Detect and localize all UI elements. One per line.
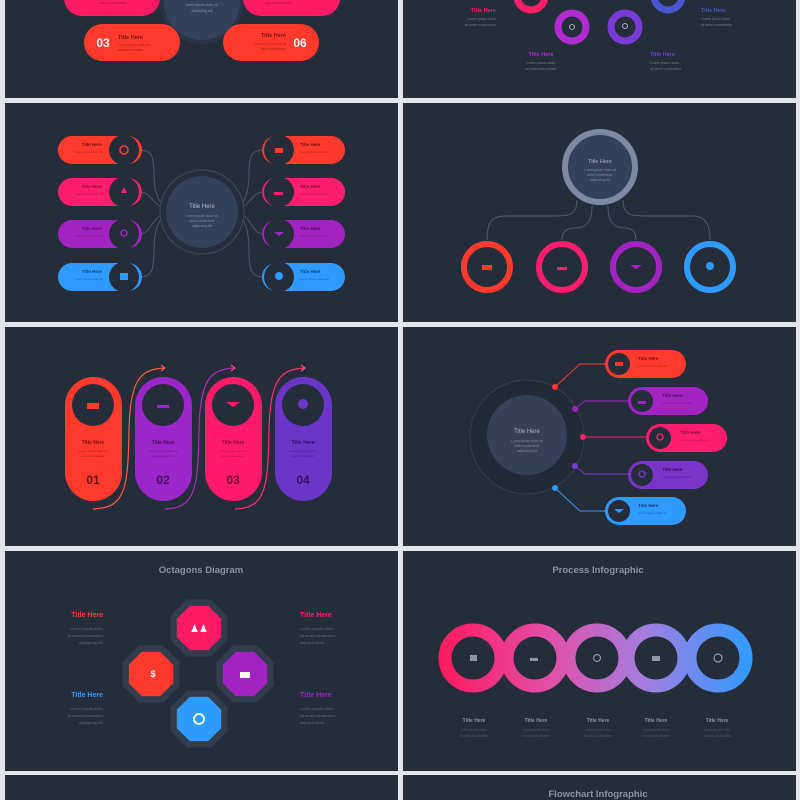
- text: purple: adipiscing elit: [300, 720, 325, 725]
- ring icons: [470, 654, 722, 662]
- column 03: [205, 377, 262, 501]
- pill purple: Title Here: [662, 393, 683, 398]
- labels: [460, 718, 732, 738]
- left pill 4: Title Here: [82, 269, 102, 274]
- text: purple: [300, 692, 336, 725]
- pill blue: Title Here: [638, 503, 659, 508]
- text: blue: sit amet consectetur: [67, 713, 104, 718]
- right pill 4: Lorem ipsum dolor sit: [300, 277, 329, 281]
- center circle: adipiscing elit: [590, 178, 610, 182]
- text: red: sit amet consectetur: [67, 633, 104, 638]
- octagon left red: [122, 645, 180, 703]
- text: purple: Lorem ipsum dolor: [527, 61, 556, 65]
- text: pink: Lorem ipsum dolor: [467, 17, 497, 21]
- center circle: Title Here: [189, 204, 216, 210]
- octagon left red: $: [150, 669, 156, 679]
- panel: pill cluster (top left): [5, 0, 398, 98]
- octagon bottom blue: [170, 690, 228, 748]
- pill: 03: Lorem ipsum dolor sit: [118, 43, 150, 47]
- right pill 3: Lorem ipsum dolor sit: [300, 234, 329, 238]
- panel: flowchart infographic: Flowchart Infographic: [548, 789, 648, 800]
- arrows: [93, 365, 305, 509]
- ring violet: [611, 13, 639, 41]
- column 01: Title Here: [82, 440, 105, 446]
- text: purple: sit amet consectetur: [300, 713, 336, 718]
- panel: flowchart infographic: [403, 775, 796, 800]
- connectors: [555, 364, 646, 511]
- labels: Lorem ipsum dolor: [585, 728, 612, 732]
- right pill 1: Title Here: [300, 142, 321, 147]
- pill violet: Lorem ipsum dolor sit: [662, 475, 691, 479]
- labels: Lorem ipsum dolor: [523, 728, 550, 732]
- column 01: Lorem ipsum dolor sit: [79, 449, 108, 453]
- center circle: Title Here: [514, 429, 541, 435]
- text: violet: Title Here: [650, 52, 675, 58]
- column 02: amet consectetur: [151, 454, 175, 458]
- center circle: amet consectetur: [587, 173, 614, 177]
- text: blue: [67, 692, 104, 725]
- labels: sit amet consectetur: [703, 734, 732, 738]
- left pill 2: Lorem ipsum dolor sit: [74, 192, 103, 196]
- column 01: [65, 377, 122, 501]
- child ring purple: [613, 244, 659, 290]
- connectors: [487, 200, 710, 240]
- text: blue: sit amet consectetur: [701, 23, 733, 27]
- pill: top right pink: amet consectetur: [265, 1, 293, 5]
- pill purple: [628, 387, 708, 415]
- text: purple: Lorem ipsum dolor: [300, 706, 334, 711]
- center circle: amet consectetur: [189, 219, 216, 223]
- ring purple: [558, 13, 586, 41]
- pill pink: Title Here: [680, 430, 701, 435]
- left pill 1: Title Here: [82, 142, 102, 147]
- text: pink: adipiscing elit: [300, 640, 325, 645]
- text: purple: Title Here: [300, 692, 332, 699]
- right pill 3: Title Here: [300, 226, 321, 231]
- labels: Lorem ipsum dolor: [461, 728, 488, 732]
- pill pink: Lorem ipsum dolor sit: [680, 438, 709, 442]
- text: red: Lorem ipsum dolor: [70, 626, 104, 631]
- left pill 4: Lorem ipsum dolor sit: [74, 277, 103, 281]
- left pill 3: Lorem ipsum dolor sit: [74, 234, 103, 238]
- text: red: adipiscing elit: [79, 640, 104, 645]
- panel: process infographic: [403, 551, 796, 771]
- column 02: 02: [156, 473, 170, 487]
- right pill 2: Lorem ipsum dolor sit: [300, 192, 329, 196]
- panel: ring timeline (top right): [403, 0, 796, 98]
- pill: 06: 06: [293, 36, 307, 50]
- outer ring: [470, 380, 584, 494]
- labels: sit amet consectetur: [522, 734, 551, 738]
- labels: Lorem ipsum dolor: [643, 728, 670, 732]
- right pill 3: [262, 219, 345, 249]
- column 01: 01: [86, 473, 100, 487]
- center circle: [487, 395, 567, 475]
- labels: Title Here: [463, 718, 486, 724]
- right pill 1: Lorem ipsum dolor sit: [300, 150, 329, 154]
- panel: octagons diagram: [5, 551, 398, 771]
- text: purple: sit amet consectetur: [525, 67, 557, 71]
- octagon top pink: [170, 599, 228, 657]
- panel: radial list: [403, 327, 796, 546]
- pill blue: [605, 497, 686, 525]
- left pill 2: Title Here: [82, 184, 102, 189]
- text: violet: Lorem ipsum dolor: [650, 61, 680, 65]
- column 03: amet consectetur: [221, 454, 245, 458]
- right pill 2: [262, 177, 345, 207]
- column 03: Lorem ipsum dolor sit: [219, 449, 248, 453]
- labels: Title Here: [645, 718, 668, 724]
- center circle: Lorem ipsum dolor sit: [584, 168, 616, 172]
- column 01: amet consectetur: [81, 454, 105, 458]
- column 03: 03: [226, 473, 240, 487]
- panel: bottom left: [5, 775, 398, 800]
- panel: hierarchy tree: [403, 103, 796, 322]
- text: purple: Title Here: [529, 52, 553, 58]
- panel: four step columns: [5, 327, 398, 546]
- text: pink: [465, 8, 497, 27]
- heading: Process Infographic: [552, 565, 644, 576]
- center circle: Lorem ipsum dolor sit: [511, 439, 543, 443]
- connectors: [139, 150, 264, 277]
- text: red: [67, 612, 104, 645]
- labels: Title Here: [706, 718, 729, 724]
- pill: 03: 03: [96, 36, 110, 50]
- text: pink: sit amet consectetur: [300, 633, 336, 638]
- center circle: [160, 170, 244, 254]
- labels: Title Here: [587, 718, 610, 724]
- octagon top pink: ♟♟: [190, 624, 208, 635]
- text: blue: Title Here: [71, 692, 103, 699]
- pill: top right pink: [243, 0, 340, 16]
- pill: 06: [223, 24, 319, 61]
- column 02: Title Here: [152, 440, 175, 446]
- pill: 03: Title Here: [118, 35, 143, 41]
- left pill 1: Lorem ipsum dolor sit: [74, 150, 103, 154]
- column 04: [275, 377, 332, 501]
- text: pink: sit amet consectetur: [465, 23, 497, 27]
- text: blue: [701, 8, 733, 27]
- text: pink: Lorem ipsum dolor: [300, 626, 334, 631]
- text: blue: Lorem ipsum dolor: [70, 706, 104, 711]
- pill: top left pink: [64, 0, 160, 16]
- pill: 03: amet consectetur: [118, 48, 144, 52]
- pill: 06: Title Here: [261, 33, 286, 39]
- octagon right purple: [216, 645, 274, 703]
- pill: 06: amet consectetur: [261, 47, 287, 51]
- pill blue: Lorem ipsum dolor sit: [638, 511, 667, 515]
- right pill 2: Title Here: [300, 184, 321, 189]
- left pill 1: [58, 135, 142, 165]
- column 02: [135, 377, 192, 501]
- center circle: lorem ipsum dolor sit: [186, 3, 218, 7]
- text: violet: [650, 52, 682, 71]
- text: pink: Title Here: [300, 612, 332, 619]
- pill: top left pink: amet consectetur: [100, 1, 128, 5]
- labels: sit amet consectetur: [460, 734, 489, 738]
- left pill 2: [58, 177, 142, 207]
- left pill 4: [58, 262, 142, 292]
- labels: sit amet consectetur: [584, 734, 613, 738]
- ring pink: [517, 0, 545, 10]
- right pill 4: Title Here: [300, 269, 321, 274]
- center circle: Lorem ipsum dolor sit: [186, 214, 218, 218]
- child ring pink: [539, 244, 585, 290]
- right pill 4: [262, 262, 345, 292]
- pill red: Lorem ipsum dolor sit: [638, 364, 667, 368]
- pill pink: [646, 424, 727, 452]
- center circle: Title Here: [588, 159, 612, 165]
- center circle: amet consectetur: [514, 444, 541, 448]
- text: blue: Lorem ipsum dolor: [701, 17, 731, 21]
- labels: Title Here: [525, 718, 548, 724]
- pill: 06: Lorem ipsum dolor sit: [254, 42, 286, 46]
- center circle: [565, 132, 635, 202]
- text: blue: Title Here: [701, 8, 726, 14]
- column 04: Lorem ipsum dolor sit: [289, 449, 318, 453]
- text: blue: adipiscing elit: [79, 720, 104, 725]
- child ring red: [464, 244, 510, 290]
- column 04: 04: [296, 473, 310, 487]
- pill violet: [628, 461, 708, 489]
- gradient rings: [445, 630, 746, 686]
- labels: sit amet consectetur: [642, 734, 671, 738]
- center circle: adipiscing elit: [191, 9, 213, 13]
- column 02: Lorem ipsum dolor sit: [149, 449, 178, 453]
- center circle: [162, 0, 242, 42]
- text: red: Title Here: [71, 612, 103, 619]
- pill purple: Lorem ipsum dolor sit: [662, 401, 691, 405]
- right pill 1: [262, 135, 345, 165]
- pill red: Title Here: [638, 356, 659, 361]
- text: pink: Title Here: [471, 8, 496, 14]
- column 03: Title Here: [222, 440, 245, 446]
- text: purple: [525, 52, 557, 71]
- text: violet: sit amet consectetur: [650, 67, 682, 71]
- column 04: Title Here: [292, 440, 315, 446]
- column 04: amet consectetur: [291, 454, 315, 458]
- dots: [552, 384, 586, 491]
- child ring blue: [687, 244, 733, 290]
- left pill 3: Title Here: [82, 226, 102, 231]
- panel: mind map eight pills: [5, 103, 398, 322]
- pill violet: Title Here: [662, 467, 683, 472]
- heading: Octagons Diagram: [159, 565, 243, 576]
- pill red: [605, 350, 686, 378]
- text: pink: [300, 612, 336, 645]
- center circle: adipiscing elit: [517, 449, 537, 453]
- center circle: adipiscing elit: [192, 224, 212, 228]
- labels: Lorem ipsum dolor: [704, 728, 731, 732]
- ring blue: [654, 0, 682, 10]
- left pill 3: [58, 219, 142, 249]
- pill: 03: [84, 24, 180, 61]
